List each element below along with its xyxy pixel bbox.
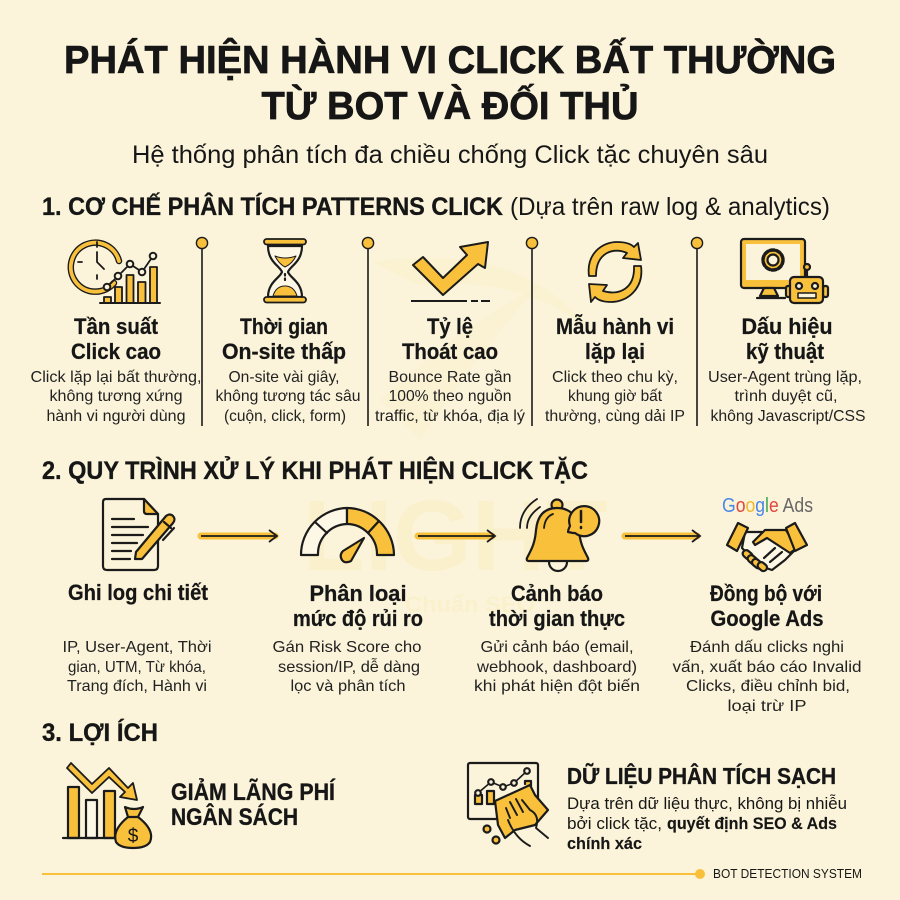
- icon: monitor and robot: [741, 239, 828, 303]
- section heading 1: (Dựa trên raw log & analytics): [510, 193, 830, 221]
- column dividers: [196, 237, 703, 426]
- icon: falling chart and money bag: [63, 763, 151, 848]
- arrow: [625, 530, 700, 542]
- text: real-time alerts: khi phát hiện đột biến: [474, 678, 640, 695]
- text: risk classification: lọc và phân tích: [290, 678, 406, 695]
- icon: bounce arrow: [411, 242, 490, 301]
- text: detailed logging: Trang đích, Hành vi: [67, 678, 207, 695]
- text: real-time alerts: thời gian thực: [489, 606, 625, 631]
- benefit: reduce wasted budget: NGÂN SÁCH: [171, 803, 298, 831]
- text: low on-site time: [216, 314, 360, 425]
- text: technical signs: User-Agent trùng lặp,: [708, 369, 862, 386]
- benefit: clean analytics data: Dựa trên dữ liệu thực, không bị nhiễu: [567, 794, 847, 813]
- text: risk classification: mức độ rủi ro: [293, 606, 423, 631]
- arrow: [201, 530, 277, 542]
- text: high bounce rate: traffic, từ khóa, địa lý: [375, 408, 525, 425]
- section heading 1: [42, 191, 830, 221]
- text: high click frequency: Click lặp lại bất thường,: [30, 369, 202, 386]
- text: risk classification: session/IP, dễ dàng: [278, 657, 420, 676]
- benefit: clean analytics data: chính xác: [567, 834, 642, 853]
- text: sync with Google Ads: Google Ads: [710, 606, 824, 631]
- text: technical signs: [708, 314, 866, 425]
- text: high bounce rate: Thoát cao: [402, 339, 498, 364]
- icon: clock and rising chart: [71, 242, 160, 303]
- text: sync with Google Ads: vấn, xuất báo cáo Invalid: [672, 659, 862, 676]
- text: low on-site time: (cuộn, click, form): [224, 408, 346, 425]
- benefit: reduce wasted budget: GIẢM LÃNG PHÍ: [171, 777, 336, 806]
- text: low on-site time: không tương tác sâu: [216, 388, 360, 405]
- benefit: clean analytics data: [567, 762, 847, 853]
- icon: handshake: [727, 523, 807, 573]
- text: technical signs: Dấu hiệu: [742, 314, 832, 339]
- section heading 2: 2. QUY TRÌNH XỬ LÝ KHI PHÁT HIỆN CLICK TẶC: [42, 455, 588, 485]
- text: detailed logging: IP, User-Agent, Thời: [62, 639, 212, 656]
- icon: cleaning the data chart: [468, 763, 548, 846]
- icon: risk gauge: [301, 508, 394, 562]
- icon: log document and pen: [103, 499, 174, 570]
- text: high bounce rate: Bounce Rate gần: [388, 369, 512, 386]
- text: sync with Google Ads: Clicks, điều chỉnh bid,: [686, 678, 850, 695]
- text: repeated behavior pattern: Mẫu hành vi: [556, 314, 674, 339]
- watermark logo: LIGHT: [302, 480, 608, 592]
- arrow: [418, 530, 495, 542]
- text: risk classification: Phân loại: [310, 581, 406, 606]
- benefit: reduce wasted budget: [171, 777, 336, 831]
- text: high click frequency: Tần suất: [74, 314, 159, 339]
- text: repeated behavior pattern: Click theo chu kỳ,: [552, 369, 678, 386]
- section heading 3: 3. LỢI ÍCH: [42, 718, 158, 747]
- title: TỪ BOT VÀ ĐỐI THỦ: [262, 83, 638, 128]
- text: sync with Google Ads: Đánh dấu clicks nghi: [690, 639, 844, 656]
- text: technical signs: trình duyệt cũ,: [734, 388, 838, 405]
- text: low on-site time: On-site thấp: [222, 339, 346, 364]
- text: risk classification: Gán Risk Score cho: [272, 639, 422, 656]
- benefit: clean analytics data: quyết định SEO & Ads: [667, 814, 837, 833]
- footer: BOT DETECTION SYSTEM: [713, 867, 862, 881]
- text: detailed logging: Ghi log chi tiết: [68, 580, 209, 605]
- icon: repeating cycle: [589, 242, 641, 302]
- icon: alert bell: [520, 499, 599, 571]
- text: sync with Google Ads: [672, 581, 862, 715]
- dollar sign: $: [128, 826, 139, 847]
- footer: [42, 867, 862, 881]
- watermark logo: [302, 258, 608, 617]
- section heading 1: 1. CƠ CHẾ PHÂN TÍCH PATTERNS CLICK: [42, 191, 503, 221]
- text: technical signs: không Javascript/CSS: [710, 408, 866, 425]
- text: high bounce rate: Tỷ lệ: [427, 314, 473, 339]
- title: PHÁT HIỆN HÀNH VI CLICK BẤT THƯỜNG: [64, 38, 836, 82]
- text: repeated behavior pattern: thường, cùng dải IP: [545, 408, 685, 425]
- text: repeated behavior pattern: khung giờ bất: [568, 388, 663, 405]
- text: low on-site time: On-site vài giây,: [228, 369, 340, 386]
- text: risk classification: [272, 581, 423, 695]
- watermark logo: Chuẩn SEO: [405, 592, 535, 617]
- text: real-time alerts: Gửi cảnh báo (email,: [480, 639, 634, 656]
- text: high click frequency: hành vi người dùng: [46, 408, 186, 425]
- icon: hourglass: [264, 239, 306, 302]
- text: high bounce rate: 100% theo nguồn: [388, 388, 512, 405]
- text: real-time alerts: Cảnh báo: [511, 581, 603, 606]
- text: high bounce rate: [375, 314, 525, 425]
- Google Ads logo: Google Ads: [722, 495, 813, 517]
- title: [64, 38, 836, 128]
- text: detailed logging: [62, 580, 212, 695]
- text: sync with Google Ads: Đồng bộ với: [710, 581, 822, 606]
- text: high click frequency: Click cao: [71, 339, 161, 364]
- text: repeated behavior pattern: lặp lại: [585, 339, 645, 364]
- text: sync with Google Ads: loại trừ IP: [728, 698, 806, 715]
- subtitle: Hệ thống phân tích đa chiều chống Click tặc chuyên sâu: [132, 141, 768, 169]
- text: high click frequency: không tương xứng: [50, 388, 182, 405]
- text: low on-site time: Thời gian: [240, 314, 328, 339]
- benefit: clean analytics data: DỮ LIỆU PHÂN TÍCH SẠCH: [567, 762, 836, 789]
- text: technical signs: kỹ thuật: [746, 339, 825, 364]
- text: high click frequency: [30, 314, 202, 425]
- text: real-time alerts: webhook, dashboard): [476, 659, 637, 676]
- text: real-time alerts: [474, 581, 640, 695]
- text: detailed logging: gian, UTM, Từ khóa,: [68, 659, 206, 676]
- text: repeated behavior pattern: [545, 314, 685, 425]
- benefit: clean analytics data: bởi click tặc,: [567, 814, 662, 833]
